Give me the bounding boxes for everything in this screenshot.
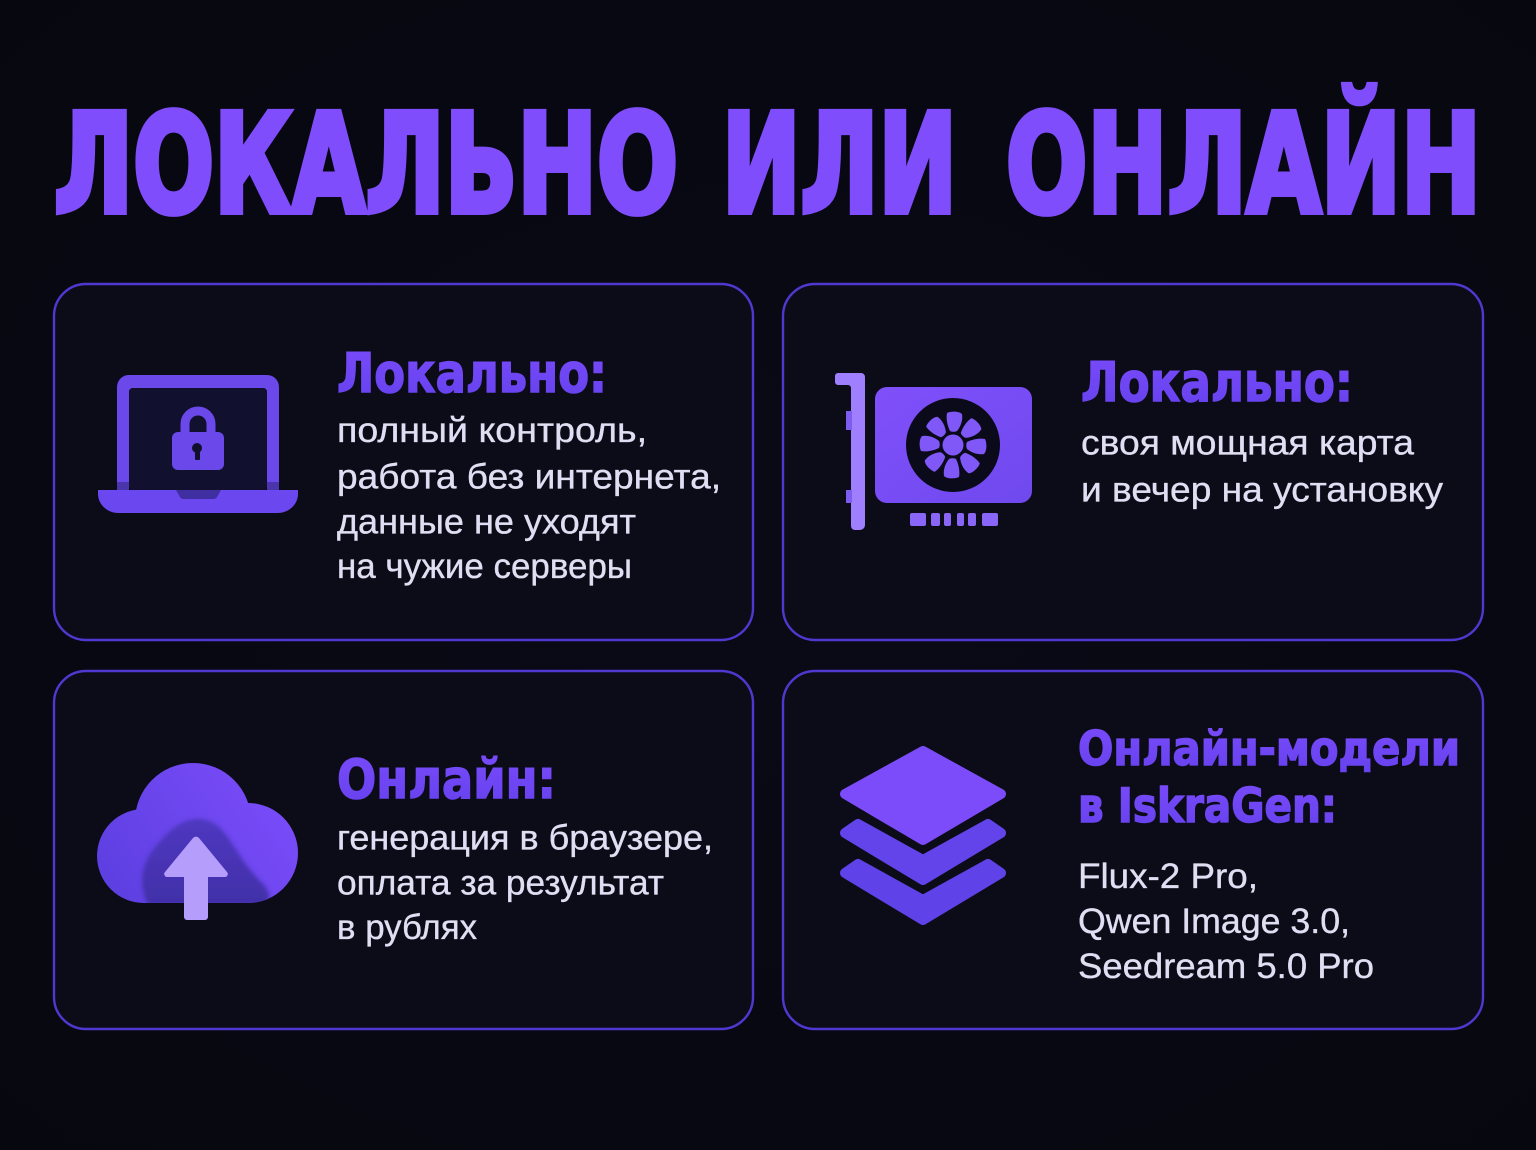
text block: оплата за результат xyxy=(337,864,664,902)
text block xyxy=(337,411,721,586)
text block: на чужие серверы xyxy=(337,547,632,586)
icon: graphics card xyxy=(835,373,1032,530)
text block: в рублях xyxy=(337,908,477,947)
title: ЛОКАЛЬНО xyxy=(54,86,678,244)
icon: laptop with lock xyxy=(98,375,298,513)
panel: online xyxy=(54,671,753,1029)
heading: Онлайн: xyxy=(337,748,556,811)
text block xyxy=(1081,424,1444,510)
heading: Локально: xyxy=(1081,351,1353,414)
text block: работа без интернета, xyxy=(337,458,721,496)
heading: Локально: xyxy=(337,342,607,405)
heading: Онлайн-модели xyxy=(1078,722,1460,777)
heading: в IskraGen: xyxy=(1078,779,1337,834)
title xyxy=(54,86,1481,244)
text block: данные не уходят xyxy=(337,502,636,542)
text block: генерация в браузере, xyxy=(337,818,713,858)
title: ИЛИ xyxy=(722,86,957,244)
icon: cloud upload xyxy=(97,763,298,920)
panel: local control xyxy=(54,284,753,640)
text block xyxy=(337,818,713,947)
text block: полный контроль, xyxy=(337,411,647,450)
text block: и вечер на установку xyxy=(1081,470,1444,510)
icon: layers xyxy=(845,751,1001,920)
text block: Flux-2 Pro, xyxy=(1078,857,1258,896)
panel: local GPU xyxy=(783,284,1483,640)
text block xyxy=(1078,857,1374,986)
text block: своя мощная карта xyxy=(1081,424,1415,462)
panel: online models xyxy=(783,671,1483,1029)
heading xyxy=(1078,722,1460,834)
text block: Seedream 5.0 Pro xyxy=(1078,947,1374,986)
text block: Qwen Image 3.0, xyxy=(1078,902,1350,941)
